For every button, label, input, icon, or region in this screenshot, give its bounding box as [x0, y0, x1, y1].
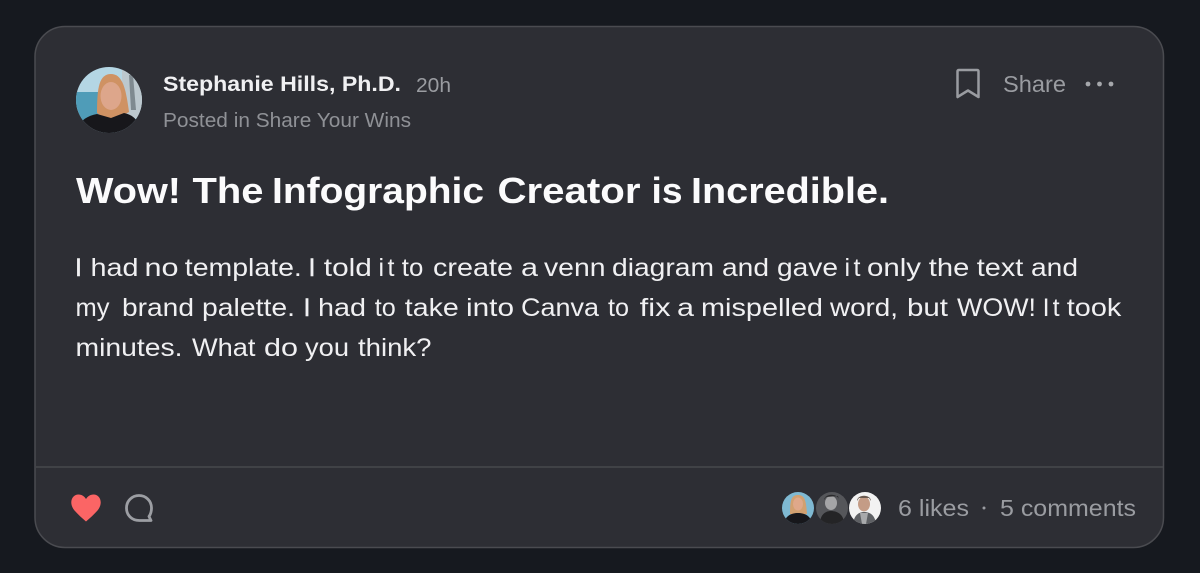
post body: I: [304, 294, 310, 322]
post body: create: [433, 254, 513, 282]
post body: Canva: [521, 294, 599, 322]
post body: brand: [122, 294, 194, 322]
footer divider: [36, 466, 1163, 468]
post title: Creator: [498, 170, 640, 211]
post body: and: [722, 254, 769, 282]
post body: took: [1067, 294, 1122, 322]
icon: heart: [71, 494, 101, 522]
post body: to: [402, 254, 423, 282]
category line: Posted in Share Your Wins: [163, 110, 411, 132]
post body: template.: [185, 254, 302, 282]
post body: I: [75, 254, 82, 282]
share label: Share: [1003, 71, 1066, 97]
post body: and: [1031, 254, 1078, 282]
icon: liker avatar 2: [816, 492, 848, 524]
post title: is: [652, 170, 682, 211]
post body: What: [192, 334, 256, 362]
post body: it: [378, 254, 395, 282]
post body: It: [1043, 294, 1060, 322]
post body: word,: [829, 294, 898, 322]
post body: no: [144, 254, 178, 282]
post body: palette.: [202, 294, 295, 322]
separator dot: [982, 506, 986, 510]
post body: I: [308, 254, 315, 282]
likes count: 6 likes: [898, 495, 969, 521]
post body: to: [608, 294, 629, 322]
post body: you: [305, 334, 349, 362]
post title: The: [192, 170, 264, 211]
post body: fix: [640, 294, 671, 322]
comments count: 5 comments: [1000, 495, 1136, 521]
icon: comment bubble: [126, 496, 152, 520]
icon: liker avatar 1: [782, 492, 814, 524]
post body: my: [76, 294, 110, 322]
post body: [75, 254, 1122, 362]
post time: 20h: [416, 75, 451, 97]
author name: Stephanie Hills, Ph.D.: [163, 73, 401, 96]
post body: told: [324, 254, 372, 282]
post body: think?: [358, 334, 432, 362]
post body: mispelled: [701, 294, 823, 322]
post body: venn: [544, 254, 606, 282]
post body: minutes.: [76, 334, 182, 362]
post body: only: [867, 254, 922, 282]
post body: had: [318, 294, 366, 322]
post body: into: [466, 294, 514, 322]
post body: to: [375, 294, 396, 322]
icon: bookmark: [958, 70, 978, 97]
icon: more menu: [1086, 82, 1113, 86]
post body: the: [929, 254, 969, 282]
post title: Wow!: [76, 170, 181, 211]
post title: Incredible.: [691, 170, 889, 211]
post body: gave: [777, 254, 838, 282]
post body: but: [907, 294, 948, 322]
post body: had: [90, 254, 138, 282]
icon: liker avatar 3: [849, 492, 881, 524]
post body: it: [844, 254, 861, 282]
post body: text: [977, 254, 1023, 282]
icon: author avatar: [76, 67, 142, 133]
post body: diagram: [612, 254, 714, 282]
post body: a: [521, 254, 538, 282]
post body: do: [264, 334, 298, 362]
post body: take: [405, 294, 459, 322]
post title: Infographic: [272, 170, 484, 211]
post body: WOW!: [957, 294, 1036, 322]
post title: [76, 170, 889, 211]
post body: a: [677, 294, 694, 322]
